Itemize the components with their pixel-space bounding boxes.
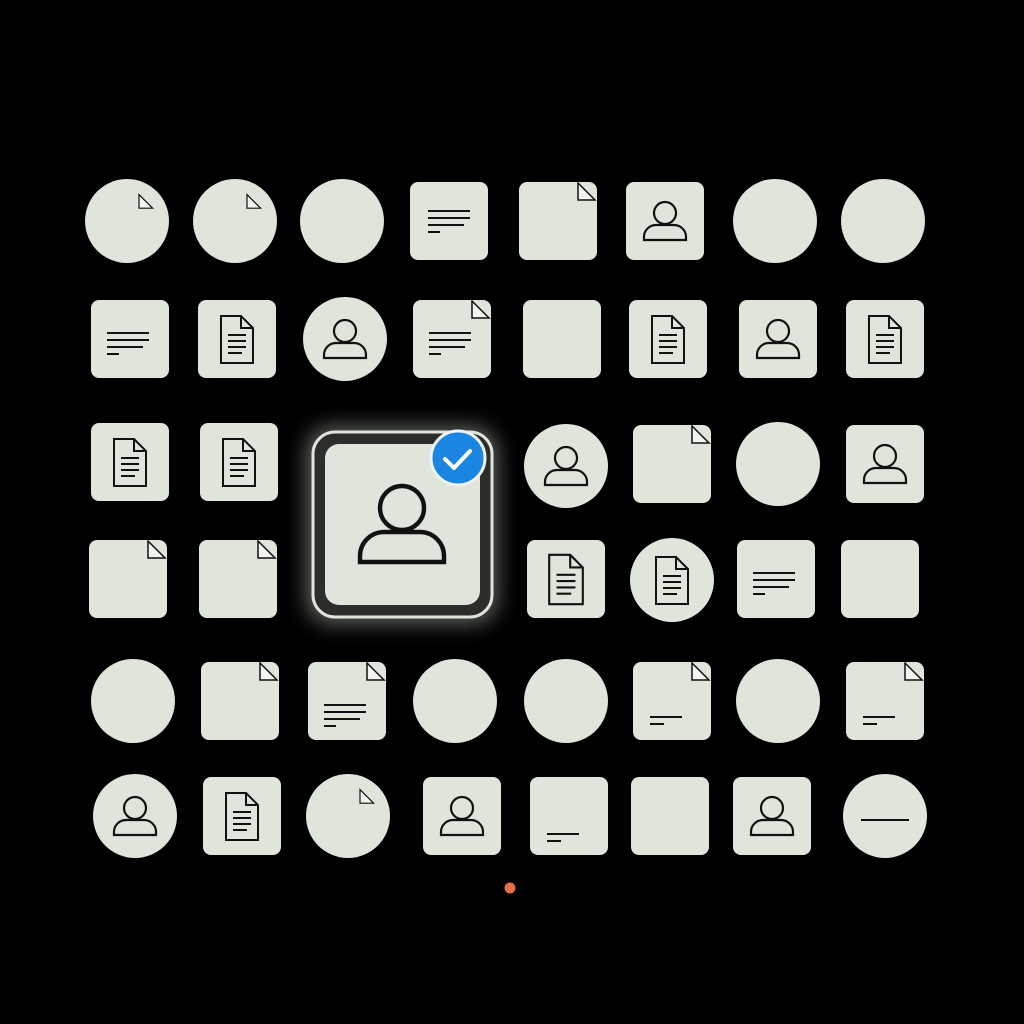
row 5	[91, 659, 924, 743]
row 3	[91, 422, 924, 508]
icon: check badge	[431, 431, 485, 485]
row 2	[91, 297, 924, 381]
icon grid	[85, 179, 927, 858]
row 1	[85, 179, 925, 263]
orange dot	[504, 882, 516, 894]
row 6	[93, 774, 927, 858]
row 4	[89, 538, 919, 622]
selected icon	[306, 426, 498, 624]
